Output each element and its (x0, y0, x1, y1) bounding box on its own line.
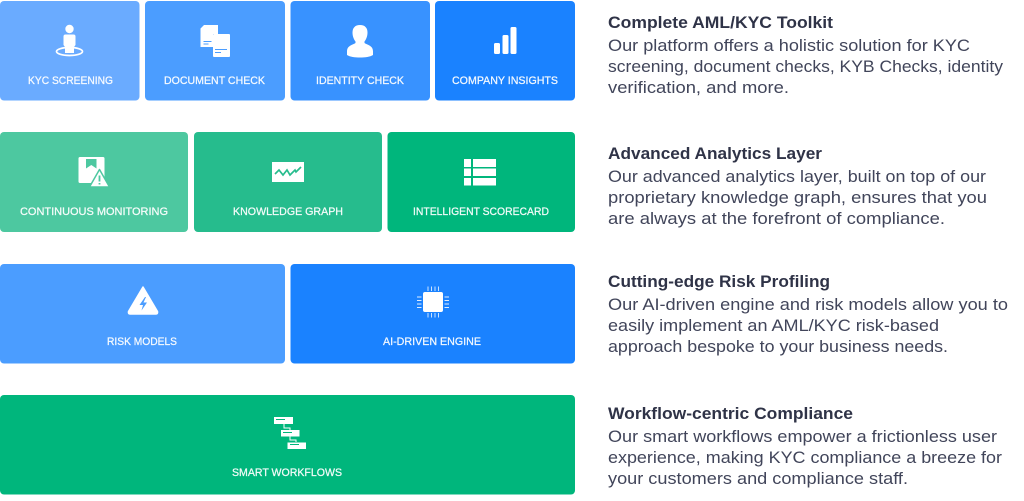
text block: risk profiling (608, 272, 1008, 356)
text block: risk profiling: approach bespoke to your business needs. (608, 337, 948, 356)
text block: analytics: proprietary knowledge graph, ensures that you (608, 188, 987, 207)
panel: continuous monitoring: CONTINUOUS MONITORING (20, 206, 168, 218)
text block: analytics: Advanced Analytics Layer (608, 144, 822, 163)
panel: company insights (435, 1, 575, 100)
panel: AI-driven engine: AI-DRIVEN ENGINE (383, 336, 481, 348)
text block: toolkit: verification, and more. (608, 78, 789, 97)
panel: document check (145, 1, 285, 100)
panel: intelligent scorecard (388, 132, 575, 232)
panel: KYC screening (0, 1, 140, 100)
panel: risk models (0, 264, 285, 364)
text block: toolkit (608, 13, 1004, 97)
icon: image with warning (78, 157, 110, 187)
icon: workflow steps (274, 417, 306, 449)
icon: processor chip (417, 286, 449, 318)
panel: knowledge graph: KNOWLEDGE GRAPH (233, 206, 343, 218)
panel: intelligent scorecard: INTELLIGENT SCORECARD (413, 206, 549, 218)
panel: AI-driven engine (290, 264, 575, 364)
panel: KYC screening: KYC SCREENING (28, 75, 113, 87)
panel: knowledge graph (194, 132, 382, 232)
icon: person on target (56, 25, 82, 56)
icon: person bust (347, 25, 373, 58)
icon: graph line (272, 162, 304, 182)
text block: toolkit: screening, document checks, KYB Checks, identity (608, 57, 1004, 76)
panel: identity check (290, 1, 430, 100)
text block: risk profiling: easily implement an AML/KYC risk-based (608, 316, 939, 335)
panel: company insights: COMPANY INSIGHTS (452, 75, 558, 87)
icon: documents (200, 25, 230, 57)
text block: risk profiling: Cutting-edge Risk Profiling (608, 272, 830, 291)
icon: table list (464, 159, 496, 186)
panel: identity check: IDENTITY CHECK (316, 75, 405, 87)
text block: workflow compliance (608, 404, 1002, 488)
panel: document check: DOCUMENT CHECK (164, 75, 266, 87)
text block: analytics: Our advanced analytics layer, built on top of our (608, 167, 986, 186)
text block: analytics: are always at the forefront of compliance. (608, 209, 945, 228)
text block: toolkit: Our platform offers a holistic solution for KYC (608, 36, 970, 55)
text block: analytics (608, 144, 987, 228)
text block: risk profiling: Our AI-driven engine and risk models allow you to (608, 295, 1008, 314)
text block: workflow compliance: your customers and compliance staff. (608, 469, 908, 488)
text block: toolkit: Complete AML/KYC Toolkit (608, 13, 833, 32)
icon: bar chart (494, 27, 516, 54)
text block: workflow compliance: Workflow-centric Compliance (608, 404, 853, 423)
text block: workflow compliance: experience, making KYC compliance a breeze for (608, 448, 1002, 467)
icon: warning bolt (128, 287, 158, 314)
panel: smart workflows (0, 395, 575, 494)
panel: continuous monitoring (0, 132, 188, 232)
panel: smart workflows: SMART WORKFLOWS (232, 467, 342, 479)
text block: workflow compliance: Our smart workflows empower a frictionless user (608, 427, 997, 446)
panel: risk models: RISK MODELS (107, 336, 177, 348)
